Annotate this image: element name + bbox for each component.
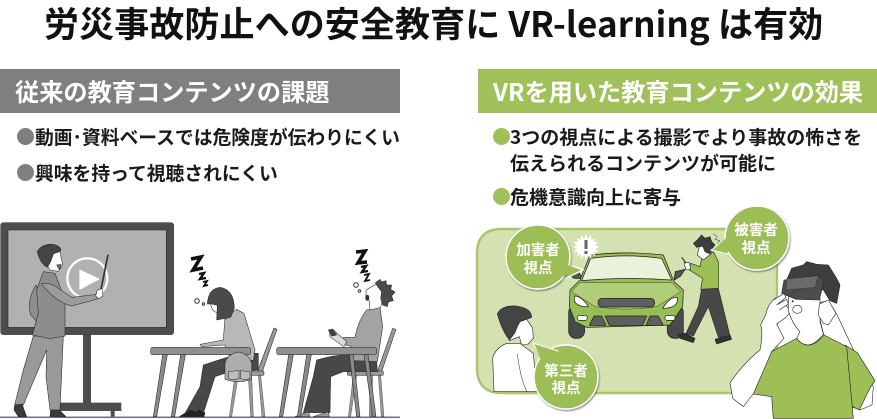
callout: victim view: 被害者: [734, 219, 778, 240]
callout: victim view: 視点: [742, 237, 771, 258]
heading: conventional content issues: [0, 69, 400, 113]
illustration: teacher and monitor: [1, 223, 174, 417]
wheels: [569, 305, 683, 338]
hair: [787, 262, 840, 303]
hood: [572, 283, 681, 309]
girl hair: [207, 287, 234, 320]
icon: play button: [67, 258, 107, 298]
illustration: car: [567, 253, 685, 338]
callout: perpetrator view: 視点: [524, 257, 553, 278]
callout: third-party view: 第三者: [544, 360, 588, 381]
mouth: [793, 305, 802, 313]
teacher back arm: [29, 285, 42, 323]
heading: VR content effects: VRを用いた教育コンテンツの効果: [493, 73, 863, 108]
text block: issues list: 興味を持って視聴されにくい: [35, 159, 278, 186]
icon: alert burst: [573, 234, 599, 260]
desk 1: [151, 347, 251, 417]
heading: conventional content issues: 従来の教育コンテンツの課題: [15, 73, 329, 108]
windshield: [582, 256, 672, 281]
text block: issues list: [17, 123, 400, 186]
right hand: [818, 300, 836, 325]
text block: effects list: 伝えられるコンテンツが可能に: [510, 149, 776, 176]
sleeve right: [845, 345, 875, 410]
body: [569, 253, 683, 327]
illustration: victim pedestrian: [678, 234, 732, 344]
text block: issues list: 動画･資料ベースでは危険度が伝わりにくい: [35, 123, 400, 150]
headlights: [574, 296, 677, 320]
mirrors: [567, 269, 685, 280]
callout: perpetrator view: [506, 225, 583, 289]
backpack: [225, 352, 252, 382]
monitor: [1, 223, 174, 335]
girl torso: [200, 309, 255, 361]
callout: third-party view: 視点: [552, 377, 581, 398]
girl face: [210, 303, 227, 319]
callout: third-party view: [533, 343, 598, 409]
girl legs: [185, 353, 258, 413]
callout: victim view: [711, 206, 789, 270]
VR goggles: [782, 275, 824, 300]
neck and face: [788, 296, 823, 345]
stand: [57, 334, 121, 417]
desk 2: [277, 347, 377, 417]
icon: sleep z marks girl: [191, 257, 208, 305]
white forearm right and elbow: [819, 301, 873, 410]
illustration: third-party bystander: [493, 306, 537, 392]
floor line: [0, 416, 400, 418]
teacher legs: [15, 336, 63, 410]
left arm: [730, 297, 791, 407]
grille: [589, 298, 663, 325]
boy legs: [303, 354, 377, 413]
fingers: [773, 293, 788, 310]
shirt: [753, 335, 853, 418]
boy torso: [340, 307, 383, 362]
girl chair: [229, 328, 277, 417]
icon: sleep z marks boy: [354, 251, 370, 292]
boy head: [366, 283, 383, 310]
callout: perpetrator view: 加害者: [516, 239, 560, 260]
text block: effects list: [493, 123, 862, 210]
pointer: [101, 255, 108, 289]
illustration: man wearing VR headset: [730, 262, 875, 418]
text block: effects list: 危機意識向上に寄与: [510, 183, 681, 210]
book: [329, 329, 347, 347]
panel: green scene background: [477, 229, 777, 393]
teacher arm: [42, 283, 99, 306]
teacher face: [46, 252, 63, 271]
teacher jacket: [32, 272, 65, 339]
illustration: sleeping students: [151, 279, 396, 417]
text block: effects list: 3つの視点による撮影でより事故の怖さを: [510, 123, 862, 150]
boy chair: [347, 328, 396, 417]
